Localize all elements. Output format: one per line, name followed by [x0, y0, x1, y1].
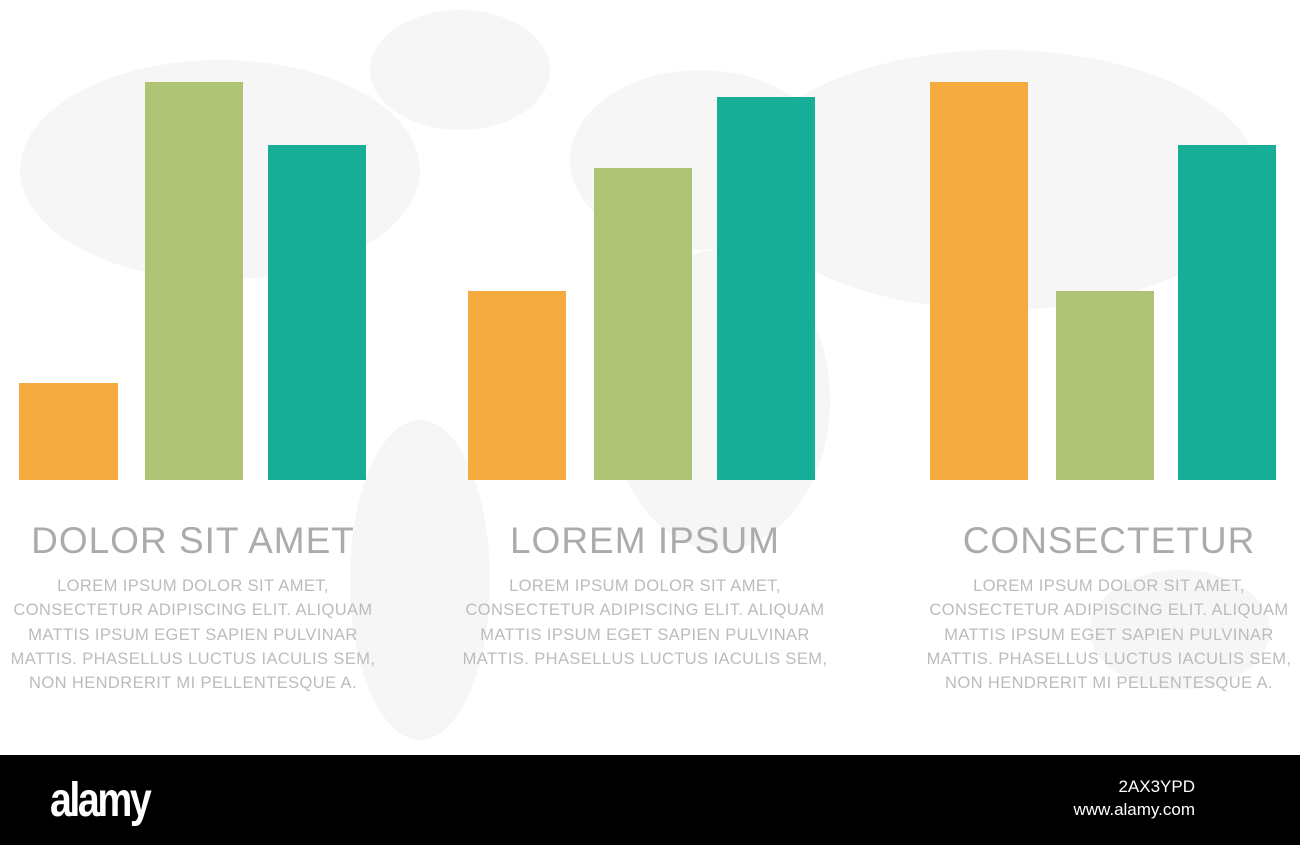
footer logo: alamy — [50, 774, 149, 827]
text 3: NON HENDRERIT MI PELLENTESQUE A. — [945, 674, 1273, 692]
text 1: LOREM IPSUM DOLOR SIT AMET, — [57, 577, 329, 595]
footer id: 2AX3YPD — [1118, 777, 1195, 796]
text 2: MATTIS IPSUM EGET SAPIEN PULVINAR — [480, 626, 810, 644]
text 2 — [463, 577, 827, 668]
bar teal — [1178, 145, 1276, 480]
text 2: MATTIS. PHASELLUS LUCTUS IACULIS SEM, — [463, 650, 827, 668]
bar green — [594, 168, 692, 480]
text 2: CONSECTETUR ADIPISCING ELIT. ALIQUAM — [465, 601, 825, 619]
text 3: CONSECTETUR ADIPISCING ELIT. ALIQUAM — [929, 601, 1289, 619]
text 1: CONSECTETUR ADIPISCING ELIT. ALIQUAM — [13, 601, 373, 619]
text 1: MATTIS. PHASELLUS LUCTUS IACULIS SEM, — [11, 650, 375, 668]
text 2: LOREM IPSUM DOLOR SIT AMET, — [509, 577, 781, 595]
heading 2: LOREM IPSUM — [510, 520, 780, 561]
text 3: LOREM IPSUM DOLOR SIT AMET, — [973, 577, 1245, 595]
bar orange — [19, 383, 118, 480]
footer url: www.alamy.com — [1073, 800, 1195, 819]
text 1: NON HENDRERIT MI PELLENTESQUE A. — [29, 674, 357, 692]
text 1: MATTIS IPSUM EGET SAPIEN PULVINAR — [28, 626, 358, 644]
bar teal — [717, 97, 815, 480]
text 3 — [927, 577, 1291, 692]
bar green — [1056, 291, 1154, 480]
bar orange — [468, 291, 566, 480]
bar green — [145, 82, 243, 480]
text 3: MATTIS IPSUM EGET SAPIEN PULVINAR — [944, 626, 1274, 644]
bar teal — [268, 145, 366, 480]
heading 3: CONSECTETUR — [963, 520, 1255, 561]
text 3: MATTIS. PHASELLUS LUCTUS IACULIS SEM, — [927, 650, 1291, 668]
footer bar — [0, 755, 1300, 845]
heading 1: DOLOR SIT AMET — [31, 520, 355, 561]
chart group 1 — [19, 82, 366, 480]
text 1 — [11, 577, 375, 692]
bar orange — [930, 82, 1028, 480]
chart group 2 — [468, 97, 815, 480]
chart group 3 — [930, 82, 1276, 480]
